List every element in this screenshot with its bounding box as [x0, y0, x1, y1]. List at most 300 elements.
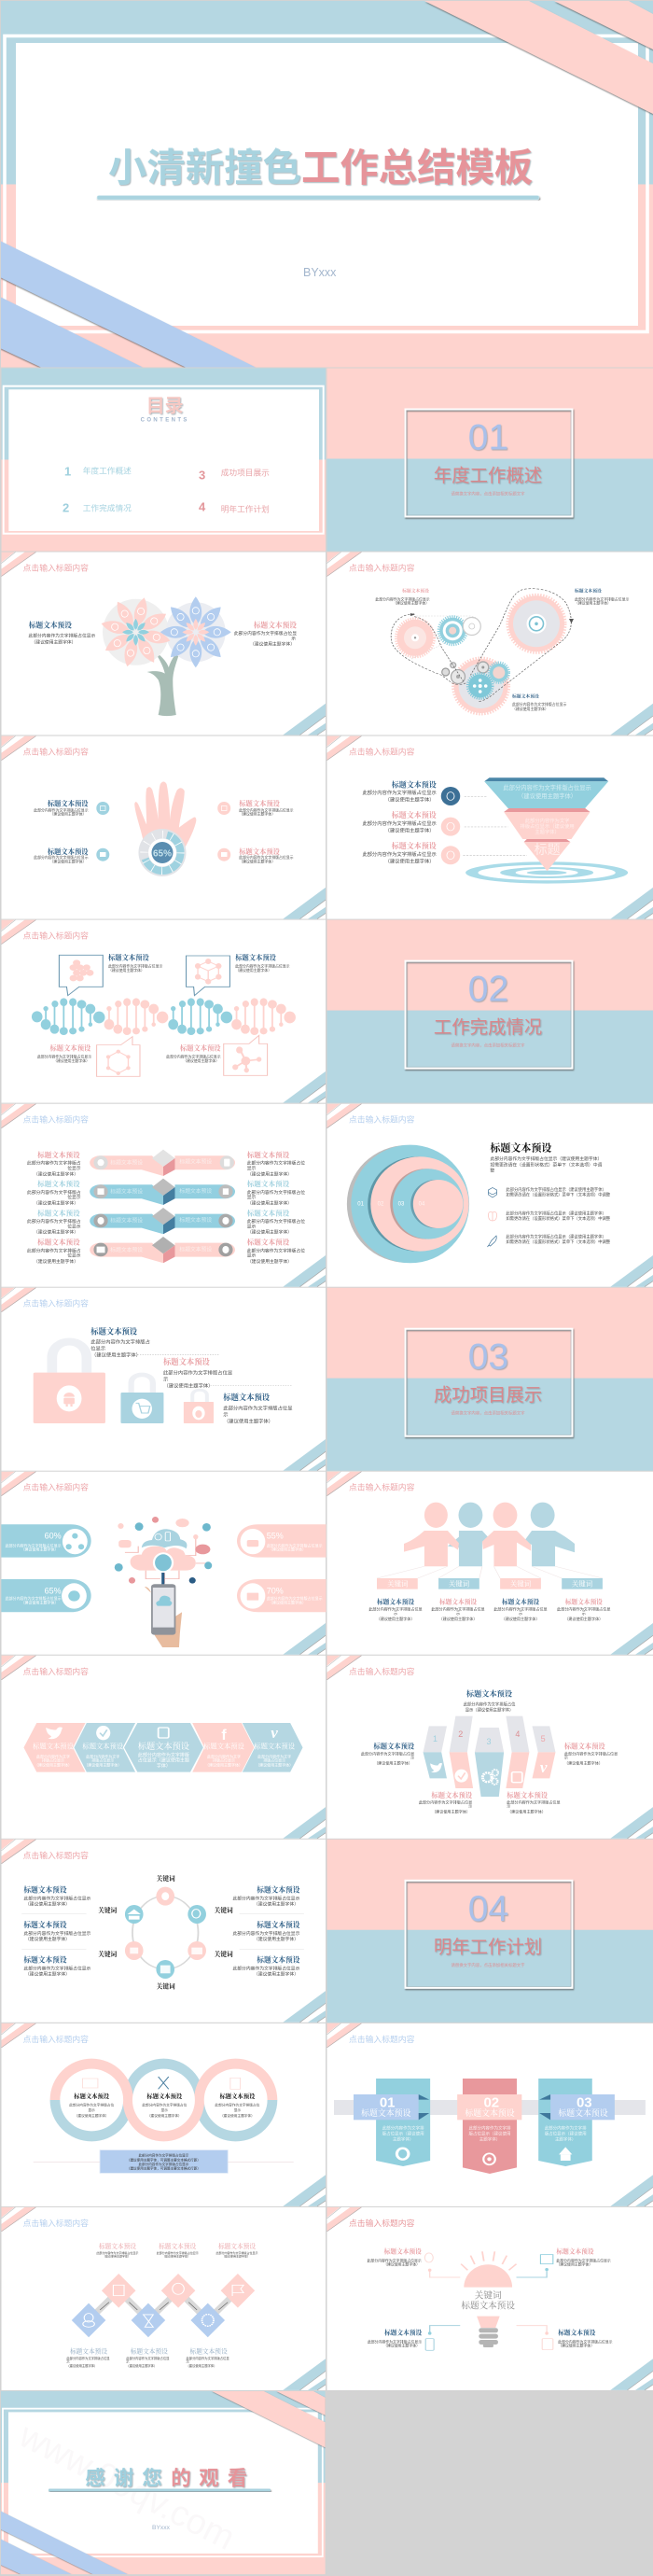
list: icons and descriptions: 此部分内容作为文字排版占位显示（建议使用主题字体）: [506, 1186, 606, 1193]
text: column numbers: [433, 1729, 548, 1776]
text: left column: 标题文本预设: [23, 1955, 67, 1965]
text: circle numbers: 03: [398, 1202, 405, 1208]
text: left column: （建议使用主题字体）: [34, 1229, 78, 1236]
text: keywords: 关键词: [98, 1950, 118, 1958]
text: ribbon labels: 标题文本预设: [361, 2107, 411, 2118]
text: side and bottom labels: 标题文本预设: [373, 1743, 415, 1751]
heading: contents: CONTENTS: [141, 418, 189, 424]
text: four labels: 标题文本预设: [48, 847, 89, 856]
text: left labels: （建议使用主题字体）: [385, 795, 435, 803]
text: right column: 此部分内容作为文字排版占位: [247, 1218, 305, 1225]
closing underline: [49, 2488, 271, 2492]
text: caption box: 此部分内容作为文字排版占位显示: [138, 2162, 189, 2166]
text: keywords and labels: 示: [456, 1611, 460, 1616]
text: left column: 位显示: [67, 1223, 81, 1229]
panel: light bulb slide: [326, 2207, 653, 2390]
text: left: 此部分内容作为文字排版占位显示: [28, 632, 96, 638]
icons: social letters: f: [221, 1728, 227, 1743]
icons: social letters: [221, 1724, 278, 1743]
text: four labels: [34, 799, 294, 863]
author line: BYxxx: [303, 266, 337, 279]
text: top label: 标题文本预设: [466, 1689, 513, 1699]
closing title: 谢: [114, 2467, 133, 2489]
panel: section 03: 成功项目展示: [434, 1385, 542, 1406]
text: ribbon labels: 03: [577, 2095, 592, 2111]
text: four labels: 此部分内容作为文字排版占位显示: [556, 2259, 611, 2263]
text: DNA labels: 此部分内容作为文字排版占位显示: [108, 964, 162, 969]
text: keywords and labels: （建议使用主题字体）: [377, 1616, 414, 1621]
text: right column: （建议使用主题字体）: [254, 1900, 299, 1907]
text: right column: 此部分内容作为文字排版占位显示: [232, 1895, 300, 1901]
chart: flower tree: [92, 589, 231, 716]
text: percentages: （建议使用主题字体）: [21, 1547, 58, 1552]
text: four labels: [367, 2247, 613, 2348]
text: right column: 标题文本预设: [257, 1955, 300, 1965]
text: right column: 标题文本预设: [257, 1884, 300, 1894]
text: left column: （建议使用主题字体）: [34, 1200, 78, 1206]
icon: hand with 65% dial: 65%: [153, 849, 172, 859]
icons: side circles: [96, 802, 230, 861]
text: lock 1: 标题文本预设: [90, 1326, 138, 1336]
text: right column: 显示: [247, 1166, 256, 1171]
text: ring labels: 标题文本预设: [220, 2092, 256, 2100]
text: left column: [23, 1884, 91, 1978]
contents list: [63, 464, 270, 514]
text: top labels: 此部分内容作为文字排版占位显示: [96, 2250, 138, 2255]
text: keywords and labels: 标题文本预设: [565, 1598, 603, 1606]
text: DNA labels: （建议使用主题字体）: [235, 968, 271, 973]
text: hexagon labels: [33, 1741, 296, 1769]
text: hexagon labels: 此部分内容作为文字: [36, 1753, 70, 1758]
text: right column: 标题文本预设: [257, 1920, 300, 1929]
text: hexagon labels: 标题文本预设: [33, 1743, 75, 1751]
panel: gears slide: 点击输入标题内容: [349, 562, 415, 573]
text: heading and body: 如需更改请在（设置形状格式）菜单下（文本选项）中调: [490, 1161, 603, 1169]
text: hexagon labels: 标题文本预设: [254, 1743, 296, 1751]
text: DNA labels: 标题文本预设: [108, 954, 149, 962]
text: hexagon labels: 标题文本预设: [82, 1743, 124, 1751]
text: left labels: 标题文本预设: [392, 841, 437, 850]
text: ribbon labels: [361, 2095, 608, 2142]
watermark: www.09qv.com: [12, 2415, 241, 2558]
text: right column: 标题文本预设: [247, 1208, 290, 1217]
panel: nested circles slide: 点击输入标题内容: [349, 1114, 415, 1125]
contents list: 明年工作计划: [221, 503, 270, 513]
text: four labels: 此部分内容作为文字排版占位显示: [558, 2339, 613, 2344]
text: top left: [375, 587, 430, 606]
text: bottom labels: 此部分内容作为文字排版占位显: [66, 2356, 110, 2360]
text: funnel labels: 此部分内容作为文字排版占位显示: [503, 783, 591, 791]
panel: section 03: 03: [468, 1337, 508, 1378]
text: ring labels: 标题文本预设: [146, 2092, 183, 2100]
text: ribbon labels: 主题字体）: [479, 2135, 500, 2142]
text: hexagon labels: 排版占位显示: [263, 1757, 285, 1763]
text: percentages: [6, 1531, 323, 1604]
text: lock 1: 位显示: [90, 1345, 105, 1352]
text: bottom: [512, 693, 566, 711]
text: ribbon labels: 主题字体）: [555, 2135, 576, 2142]
panel: closing slide: [0, 2390, 326, 2575]
text: top right: 此部分内容作为文字排版占位显示: [575, 596, 629, 601]
text: keyword: [461, 2290, 515, 2311]
contents list: 4: [199, 500, 206, 514]
text: top left: （建议使用主题字体）: [393, 601, 429, 606]
text: percentages: 此部分内容作为文字排版占位显示: [267, 1542, 323, 1547]
text: four labels: 此部分内容作为文字排版占位显示: [368, 2339, 422, 2344]
text: left column: 标题文本预设: [37, 1238, 80, 1247]
text: top labels: 标题文本预设: [159, 2242, 197, 2250]
text: right column: （建议使用主题字体）: [247, 1229, 292, 1236]
text: four labels: （建议使用主题字体）: [239, 812, 275, 817]
text: hexagon labels: （建议使用主题字体）: [205, 1762, 243, 1768]
text: right column: 标题文本预设: [247, 1179, 290, 1188]
text: column numbers: 4: [515, 1729, 520, 1739]
contents list: 3: [199, 468, 205, 482]
text: four labels: （建议使用主题字体）: [383, 2344, 420, 2348]
text: side and bottom labels: 此部分内容作为文字排版占位显: [564, 1750, 618, 1756]
closing title: 您: [142, 2467, 162, 2489]
text: side and bottom labels: 此部分内容作为文字排版占位显: [507, 1799, 561, 1805]
panel: five columns slide: 点击输入标题内容: [349, 1666, 415, 1676]
text: ribbon labels: 主题字体）: [393, 2135, 413, 2142]
text: left column: 位显示: [67, 1253, 81, 1259]
text: four labels: 标题文本预设: [239, 847, 281, 856]
text: right column: （建议使用主题字体）: [247, 1200, 292, 1206]
text: column numbers: 2: [458, 1729, 463, 1739]
panel: flower tree slide: [2, 553, 326, 735]
text: left column: 此部分内容作为文字排版占位显示: [23, 1895, 91, 1901]
text: bottom: 标题文本预设: [512, 693, 539, 700]
text: keywords and labels: 关键词: [387, 1579, 409, 1588]
panel: padlocks slide: 点击输入标题内容: [23, 1298, 89, 1309]
text: DNA labels: 标题文本预设: [50, 1043, 91, 1052]
text: four labels: 标题文本预设: [384, 2247, 422, 2255]
text: right column: 标题文本预设: [247, 1238, 290, 1247]
panel: section 03: [326, 1288, 653, 1471]
closing title: 看: [228, 2467, 247, 2489]
text: hexagon labels: （建议使用主题字体）: [35, 1762, 72, 1768]
text: keywords and labels: 此部分内容作为文字排版占位显: [557, 1606, 610, 1612]
text: keywords and labels: （建议使用主题字体）: [502, 1616, 539, 1621]
text: DNA labels: 此部分内容作为文字排版占位显示: [37, 1054, 91, 1058]
list: icons and descriptions: 如需更改请在（设置形状格式）菜单下（文本选项）中调整: [506, 1215, 611, 1222]
text: percentages: 此部分内容作为文字排版占位显示: [6, 1595, 62, 1601]
panel: ribbons slide: [326, 2023, 653, 2206]
text: keywords and labels: 关键词: [449, 1579, 470, 1588]
text: bar labels: 标题文本预设: [179, 1158, 212, 1166]
text: left labels: [362, 779, 437, 865]
text: keywords and labels: 标题文本预设: [439, 1598, 477, 1606]
text: percentages: （建议使用主题字体）: [269, 1599, 306, 1604]
text: left column: （建议使用主题字体）: [34, 1258, 78, 1265]
text: left column: 此部分内容作为文字排版占: [27, 1189, 81, 1196]
text: top right: 标题文本预设: [575, 587, 602, 594]
text: caption box: （建议使用主题字体，可调整主要文本格式行距）: [127, 2165, 201, 2170]
text: ribbon labels: 此部分内容作为文字排: [468, 2125, 511, 2132]
panel: linked rings slide: 点击输入标题内容: [23, 2034, 89, 2044]
chart: three ribbons: [334, 2079, 646, 2174]
panel: section 02: 02: [468, 970, 508, 1010]
panel: section 04: 请替换文字内容，点击添加相关标题文字: [451, 1962, 525, 1968]
text: top labels: 此部分内容作为文字排版占位显示: [157, 2250, 199, 2255]
text: DNA labels: 此部分内容作为文字排版占位显示: [166, 1054, 221, 1058]
text: circle numbers: [357, 1202, 425, 1208]
contents list: 年度工作概述: [83, 465, 132, 475]
text: funnel labels: [503, 783, 591, 857]
text: four labels: （建议使用主题字体）: [49, 812, 86, 817]
text: right: 示: [291, 637, 296, 642]
title: 小清新撞色工作总结模板: [108, 147, 533, 189]
text: top label: 显示（建议使用主题字体）: [465, 1706, 513, 1713]
text: column numbers: 5: [541, 1734, 546, 1743]
text: funnel labels: 标题: [535, 842, 561, 857]
text: top labels: （建议使用主题字体）: [222, 2253, 250, 2258]
chart: folded bars: [90, 1150, 235, 1263]
text: right column: （建议使用主题字体）: [254, 1971, 299, 1978]
text: heading and body: [490, 1141, 603, 1174]
text: top labels: （建议使用主题字体）: [103, 2253, 131, 2258]
panel: section 04: 明年工作计划: [434, 1937, 542, 1957]
text: lock 1: [90, 1326, 150, 1358]
text: top right: [575, 587, 629, 606]
text: hexagon labels: 排版占位显示: [42, 1757, 64, 1763]
text: lock 1: 此部分内容作为文字排版占: [90, 1337, 150, 1345]
text: bar labels: 标题文本预设: [179, 1245, 212, 1253]
text: left column: 标题文本预设: [37, 1208, 80, 1217]
panel: hand slide: [2, 736, 326, 919]
text: lock 2: 此部分内容作为文字排版占位显: [163, 1369, 233, 1377]
text: hexagon labels: 此部分内容作为文字: [257, 1753, 291, 1758]
text: side and bottom labels: 示: [468, 1804, 472, 1809]
text: four labels: 标题文本预设: [556, 2247, 594, 2255]
text: right column: 标题文本预设: [247, 1150, 290, 1159]
text: right column: 显示: [247, 1224, 256, 1229]
text: percentages: （建议使用主题字体）: [269, 1547, 306, 1552]
text: bottom labels: 示: [66, 2359, 70, 2363]
text: right column: 此部分内容作为文字排版占位: [247, 1160, 305, 1167]
heading: contents: 目录: [146, 396, 184, 417]
text: ring labels: [69, 2092, 260, 2118]
text: four labels: 此部分内容作为文字排版占位显示: [239, 807, 294, 812]
text: lock 1: （建议使用主题字体）: [91, 1351, 141, 1358]
text: heading and body: 此部分内容作为文字排版占位显示（建议使用主题字体）: [490, 1155, 602, 1162]
text: left column: （建议使用主题字体）: [25, 1971, 70, 1978]
text: bar labels: 标题文本预设: [110, 1217, 143, 1225]
text: bottom: （建议使用主题字体）: [512, 707, 549, 711]
text: lock 3: 示: [223, 1411, 229, 1418]
text: bottom labels: 示: [126, 2359, 130, 2363]
text: ring labels: 显示: [161, 2108, 168, 2112]
text: DNA labels: [37, 954, 290, 1063]
text: left column: 标题文本预设: [37, 1150, 80, 1159]
text: left column: [27, 1150, 81, 1265]
text: right column: 显示: [247, 1253, 256, 1259]
text: caption box: 此部分内容作为文字排版占位显示: [138, 2153, 189, 2158]
chart: split light bulb with connectors: [424, 2251, 553, 2350]
text: ring labels: 显示: [89, 2108, 95, 2112]
text: keywords and labels: （建议使用主题字体）: [439, 1616, 477, 1621]
text: top labels: 标题文本预设: [99, 2242, 136, 2250]
text: bottom labels: （建议使用主题字体）: [66, 2363, 97, 2368]
text: ribbon labels: 版占位显示（建议使用: [545, 2130, 587, 2136]
text: left column: 此部分内容作为文字排版占: [27, 1247, 81, 1253]
text: funnel labels: （建议使用主题字体）: [518, 791, 577, 800]
text: lock 2: （建议使用主题字体）: [164, 1382, 213, 1390]
text: caption box: [127, 2153, 201, 2170]
panel: flower tree slide: 点击输入标题内容: [23, 562, 89, 573]
text: four labels: 此部分内容作为文字排版占位显示: [34, 807, 89, 812]
text: top labels: 此部分内容作为文字排版占位显示: [215, 2250, 258, 2255]
text: bottom labels: （建议使用主题字体）: [126, 2363, 157, 2368]
text: right: [234, 621, 297, 648]
text: hexagon labels: 字体）: [157, 1762, 171, 1769]
text: ring labels: 此部分内容作为文字排版占位: [69, 2102, 114, 2107]
text: hexagon labels: 排版占位显示: [213, 1757, 235, 1763]
text: right column: 显示: [247, 1195, 256, 1200]
text: funnel labels: 主题字体）: [535, 828, 560, 835]
text: hexagon labels: 标题文本预设: [138, 1741, 189, 1751]
text: column numbers: 1: [433, 1734, 438, 1743]
panel: section 01: [326, 368, 653, 551]
contents list: 工作完成情况: [83, 503, 132, 513]
text: lock 2: [163, 1357, 233, 1390]
text: ribbon labels: 版占位显示（建议使用: [382, 2130, 424, 2136]
text: DNA labels: 此部分内容作为文字排版占位显示: [235, 964, 290, 969]
list: icons and descriptions: 此部分内容作为文字排版占位显示（建议使用主题字体）: [506, 1211, 606, 1217]
text: ring labels: （建议使用主题字体）: [147, 2113, 182, 2118]
text: bar labels: [110, 1158, 212, 1253]
text: left column: 此部分内容作为文字排版占: [27, 1218, 81, 1225]
panel: DNA slide: 点击输入标题内容: [23, 931, 89, 941]
text: bar labels: 标题文本预设: [110, 1246, 143, 1253]
text: DNA labels: （建议使用主题字体）: [53, 1058, 90, 1063]
text: keywords and labels: 此部分内容作为文字排版占位显: [493, 1606, 548, 1612]
chart: padlocks: [34, 1341, 293, 1423]
text: lock 3: 标题文本预设: [223, 1393, 271, 1402]
text: side and bottom labels: （建议使用主题字体）: [374, 1759, 412, 1765]
text: left labels: 此部分内容作为文字排版占位显示: [362, 819, 437, 827]
text: four labels: 标题文本预设: [558, 2329, 596, 2337]
text: right column: 此部分内容作为文字排版占位: [247, 1189, 305, 1196]
panel: 3D bars slide: 点击输入标题内容: [23, 1114, 89, 1125]
text: side and bottom labels: 示: [564, 1755, 568, 1759]
panel: section 01: 01: [468, 418, 508, 457]
text: four labels: （建议使用主题字体）: [239, 859, 275, 863]
text: lock 2: 示: [163, 1376, 168, 1382]
text: keywords and labels: 示: [394, 1611, 397, 1616]
text: bar labels: 标题文本预设: [179, 1187, 212, 1195]
text: circle numbers: 02: [378, 1202, 384, 1208]
text: keywords: [98, 1874, 233, 1991]
text: top labels: （建议使用主题字体）: [162, 2253, 190, 2258]
text: left labels: （建议使用主题字体）: [385, 827, 435, 834]
chart: five columns: [424, 1716, 555, 1797]
panel: five columns slide: [326, 1656, 653, 1839]
text: hexagon labels: 此部分内容作为文字排版: [138, 1752, 189, 1758]
chart: funnel with ripple: [441, 777, 628, 884]
text: DNA labels: 标题文本预设: [180, 1043, 221, 1052]
panel: cloud phone slide: [1, 1472, 326, 1655]
text: keywords: 关键词: [215, 1950, 233, 1958]
text: left column: （建议使用主题字体）: [25, 1936, 70, 1942]
text: hexagon labels: 占位显示（建议使用主题: [138, 1757, 189, 1764]
heading: contents: [141, 396, 189, 424]
text: left: （建议使用主题字体）: [32, 639, 76, 646]
text: ribbon labels: 此部分内容作为文字排: [545, 2125, 587, 2132]
text: ring labels: （建议使用主题字体）: [220, 2113, 255, 2118]
panel: people slide: [326, 1472, 653, 1655]
text: side and bottom labels: 标题文本预设: [564, 1743, 605, 1751]
chart: three linked rings: [34, 2059, 294, 2173]
panel: section 04: 04: [468, 1889, 508, 1929]
panel: light bulb slide: 点击输入标题内容: [349, 2218, 415, 2228]
text: column numbers: 3: [486, 1737, 492, 1746]
text: percentages: 60%: [45, 1531, 62, 1540]
text: percentages: 55%: [267, 1531, 284, 1540]
text: top left: 标题文本预设: [402, 587, 429, 594]
panel: funnel slide: 点击输入标题内容: [349, 747, 415, 757]
text: keywords: 关键词: [157, 1874, 175, 1883]
text: side and bottom labels: 此部分内容作为文字排版占位显: [419, 1799, 472, 1805]
panel: hexagon chain slide: 点击输入标题内容: [23, 1666, 89, 1676]
text: left column: 此部分内容作为文字排版占: [27, 1160, 81, 1167]
text: top left: 此部分内容作为文字排版占位显示: [375, 596, 430, 601]
contents list: 成功项目展示: [221, 467, 270, 477]
text: percentages: 此部分内容作为文字排版占位显示: [6, 1542, 62, 1547]
text: keywords and labels: 此部分内容作为文字排版占位显: [431, 1606, 485, 1612]
closing author: BYxxx: [152, 2525, 171, 2531]
text: right column: 此部分内容作为文字排版占位显示: [232, 1966, 300, 1972]
text: hexagon labels: 此部分内容作为文字: [207, 1753, 241, 1758]
text: right column: 此部分内容作为文字排版占位: [247, 1247, 305, 1253]
text: bar labels: 标题文本预设: [110, 1158, 143, 1166]
text: percentages: （建议使用主题字体）: [21, 1599, 58, 1604]
text: keywords and labels: 此部分内容作为文字排版占位显: [368, 1606, 423, 1612]
text: side and bottom labels: 此部分内容作为文字排版占位显: [361, 1750, 414, 1756]
text: side and bottom labels: 示: [410, 1755, 414, 1759]
text: hexagon labels: （建议使用主题字体）: [84, 1762, 121, 1768]
chart: gears and belts: [391, 589, 574, 714]
panel: section 03: 请替换文字内容，点击添加相关标题文字: [451, 1410, 525, 1417]
text: side and bottom labels: （建议使用主题字体）: [432, 1809, 470, 1814]
contents list: 1: [64, 464, 71, 478]
chart: four people: [377, 1503, 603, 1589]
text: bar labels: 标题文本预设: [110, 1187, 143, 1195]
text: left labels: 此部分内容作为文字排版占位显示: [362, 789, 437, 796]
text: funnel labels: 排版占位显示（建议使用: [520, 822, 575, 830]
text: top label: 此部分内容作为文字排版占位: [464, 1701, 516, 1707]
text: keywords and labels: 标题文本预设: [502, 1598, 539, 1606]
text: ring labels: 此部分内容作为文字排版占位: [142, 2102, 188, 2107]
text: four labels: 标题文本预设: [48, 799, 89, 807]
text: left column: 标题文本预设: [37, 1179, 80, 1188]
text: percentages: 65%: [45, 1586, 62, 1595]
panel: section 02: [326, 920, 653, 1103]
panel: section 01: 年度工作概述: [434, 466, 542, 486]
chart: nested circles: [347, 1145, 469, 1263]
text: right: 标题文本预设: [254, 621, 297, 630]
text: lock 3: （建议使用主题字体）: [224, 1417, 273, 1424]
text: lock 3: 此部分内容作为文字排版占位显: [223, 1405, 293, 1412]
panel: hexagon ring slide: [2, 1840, 326, 2023]
text: keywords and labels: 关键词: [510, 1579, 532, 1588]
text: DNA labels: （建议使用主题字体）: [108, 968, 145, 973]
text: left: 标题文本预设: [29, 621, 72, 630]
panel: section 01: 请替换文字内容，点击添加相关标题文字: [451, 491, 525, 497]
text: left column: 标题文本预设: [23, 1920, 67, 1929]
text: ring labels: 此部分内容作为文字排版占位: [215, 2102, 260, 2107]
text: hexagon labels: 标题文本预设: [203, 1743, 245, 1751]
